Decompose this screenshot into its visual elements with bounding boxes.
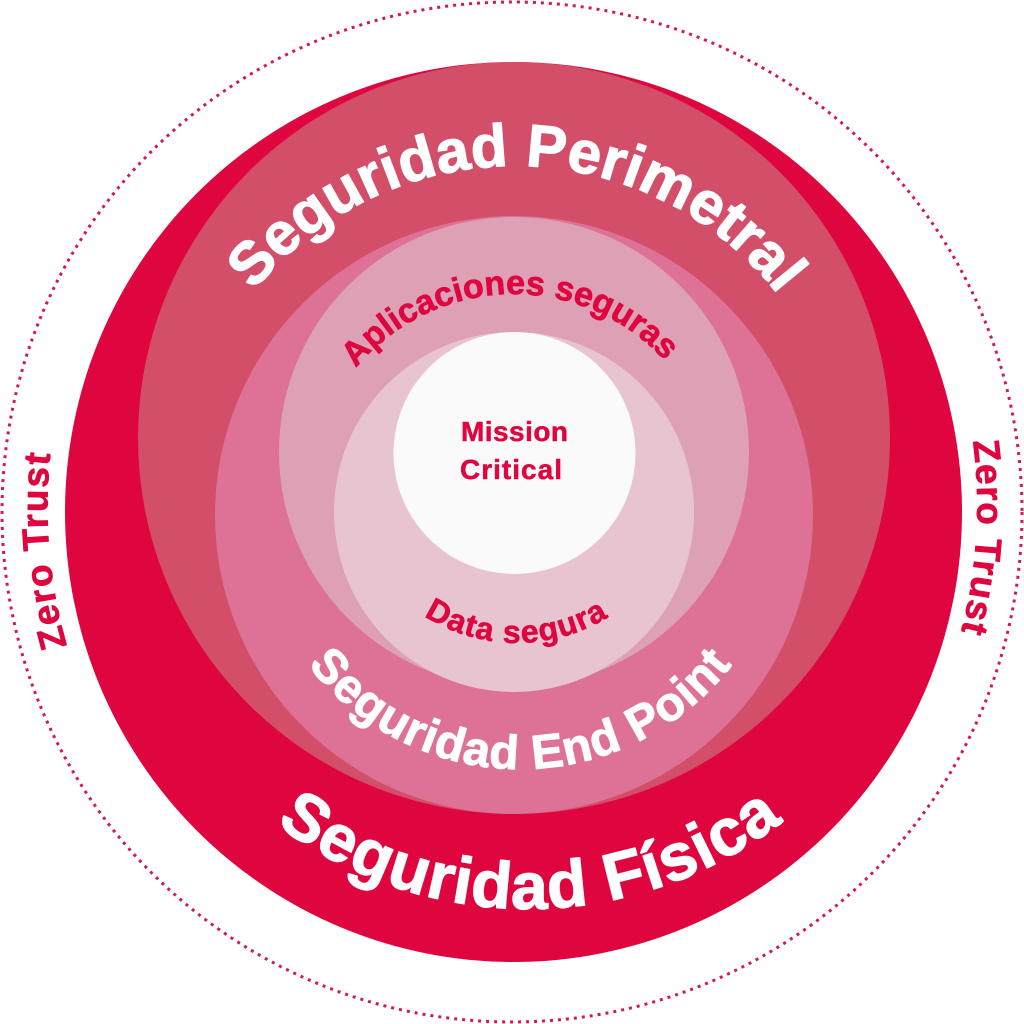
label: Zero Trust right: Zero Trust [961,440,1002,636]
label: Mission Critical: Critical [460,454,562,485]
label: Seguridad End Point: Seguridad End Point [312,648,732,770]
label: Zero Trust left: Zero Trust [22,452,67,650]
label: Mission Critical [460,416,568,485]
layer: Data segura [334,332,694,692]
layer: Seguridad Física [65,62,962,962]
layer: Seguridad Perimetral [138,62,890,814]
label: Seguridad Física: Seguridad Física [282,793,784,910]
layer: Aplicaciones seguras [279,217,749,687]
layer: Seguridad End Point [215,216,813,814]
label: Aplicaciones seguras: Aplicaciones seguras [344,276,675,368]
label: Seguridad Perimetral: Seguridad Perimetral [229,122,810,292]
layer: Mission Critical core [394,332,636,574]
label: Data segura: Data segura [425,598,609,648]
label: Mission Critical: Mission [461,416,568,447]
